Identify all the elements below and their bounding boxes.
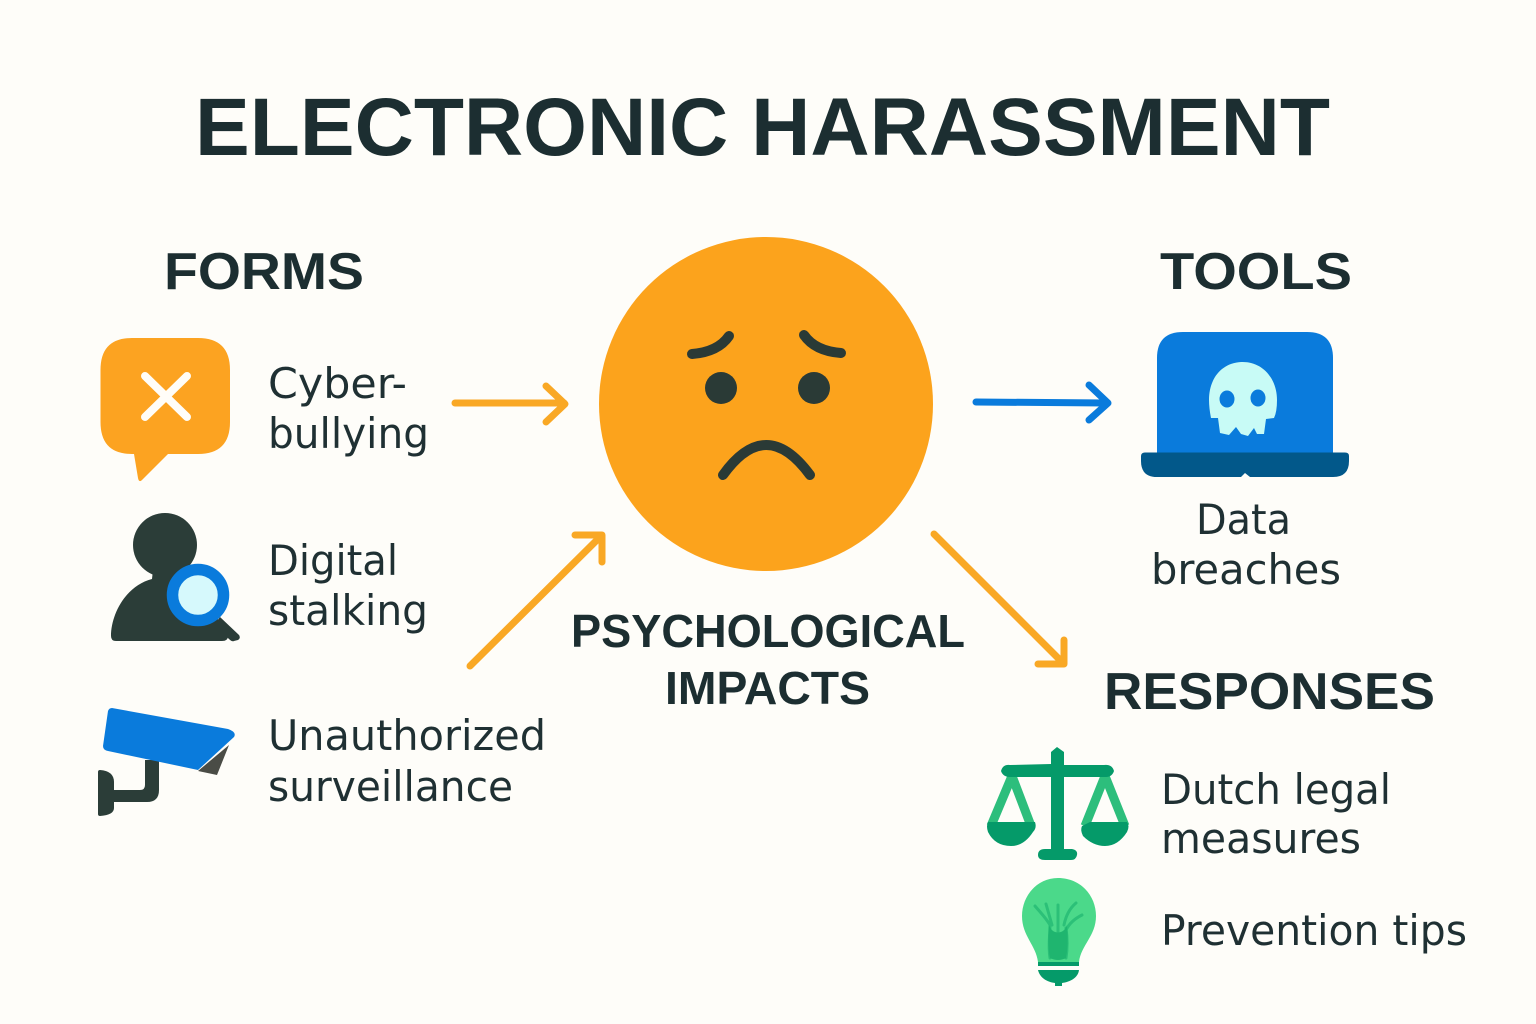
text: digital stalking: Digital <box>268 536 398 585</box>
title: ELECTRONIC HARASSMENT <box>195 82 1330 173</box>
icon: laptop with skull <box>1141 332 1349 477</box>
text: cyber-bullying: Cyber- <box>268 359 407 408</box>
icon: speech bubble with X <box>100 338 230 481</box>
text: digital stalking: stalking <box>268 586 428 635</box>
heading: psychological impacts: PSYCHOLOGICAL <box>571 605 965 657</box>
arrow: surveillance to face <box>470 535 602 666</box>
arrow: forms to face <box>455 386 565 422</box>
text: dutch legal measures: measures <box>1161 814 1361 863</box>
arrow: face to tools <box>976 385 1108 420</box>
arrow: face to responses <box>934 534 1064 664</box>
icon: surveillance camera <box>98 708 235 816</box>
heading: responses: RESPONSES <box>1104 663 1435 721</box>
icon: light bulb <box>1022 878 1096 986</box>
panel: tools <box>1141 332 1349 594</box>
icon: sad face <box>599 237 933 571</box>
text: data breaches: breaches <box>1151 545 1341 594</box>
icon: person with magnifier <box>111 513 240 641</box>
heading: tools: TOOLS <box>1160 243 1352 301</box>
heading: psychological impacts: IMPACTS <box>665 662 870 714</box>
panel: forms <box>98 338 546 816</box>
text: prevention tips: Prevention tips <box>1161 906 1467 955</box>
text: unauthorized surveillance: Unauthorized <box>268 711 546 760</box>
heading: forms: FORMS <box>164 243 364 301</box>
text: unauthorized surveillance: surveillance <box>268 762 513 811</box>
text: dutch legal measures: Dutch legal <box>1161 765 1391 814</box>
icon: scales of justice <box>987 747 1128 860</box>
text: cyber-bullying: bullying <box>268 409 429 458</box>
panel: responses <box>987 747 1467 986</box>
text: data breaches: Data <box>1196 495 1291 544</box>
